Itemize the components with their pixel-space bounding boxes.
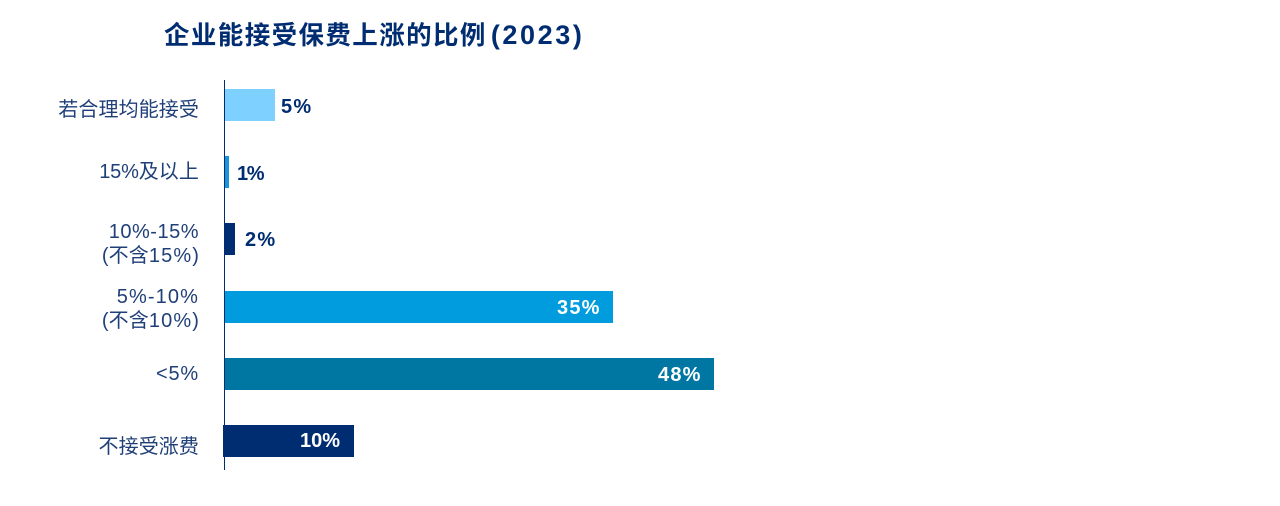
value: 1%: 1%	[237, 163, 263, 185]
label: under 5%: <5%	[156, 363, 199, 385]
bar: acceptable if reasonable	[225, 89, 275, 121]
label: 5%-10%	[102, 286, 199, 332]
label: 5%-10%: (不含10%)	[102, 310, 199, 332]
value: 48%: 48%	[658, 364, 702, 386]
label: 10%-15%	[102, 221, 199, 267]
value: 5%: 5%	[281, 96, 312, 118]
label: 10%-15%: (不含15%)	[102, 245, 199, 267]
bar: no increase accepted	[223, 425, 354, 457]
label: 5%-10%: 5%-10%	[117, 286, 199, 308]
label: 15% and above: 15%及以上	[99, 161, 199, 183]
label: acceptable if reasonable: 若合理均能接受	[58, 99, 199, 121]
label: no increase accepted: 不接受涨费	[98, 436, 199, 458]
value: 35%: 35%	[557, 297, 601, 319]
bar: 5%-10%	[225, 291, 613, 323]
axis line	[224, 80, 225, 470]
title: 企业能接受保费上涨的比例(2023)	[164, 20, 584, 50]
label: 10%-15%: 10%-15%	[109, 221, 199, 243]
bar: 10%-15%	[224, 223, 235, 255]
bar: under 5%	[225, 358, 714, 390]
bar: 15% and above	[225, 156, 229, 188]
value: 2%: 2%	[245, 229, 276, 251]
value: 10%: 10%	[300, 430, 340, 452]
chart: acceptable premium increase	[58, 80, 714, 470]
